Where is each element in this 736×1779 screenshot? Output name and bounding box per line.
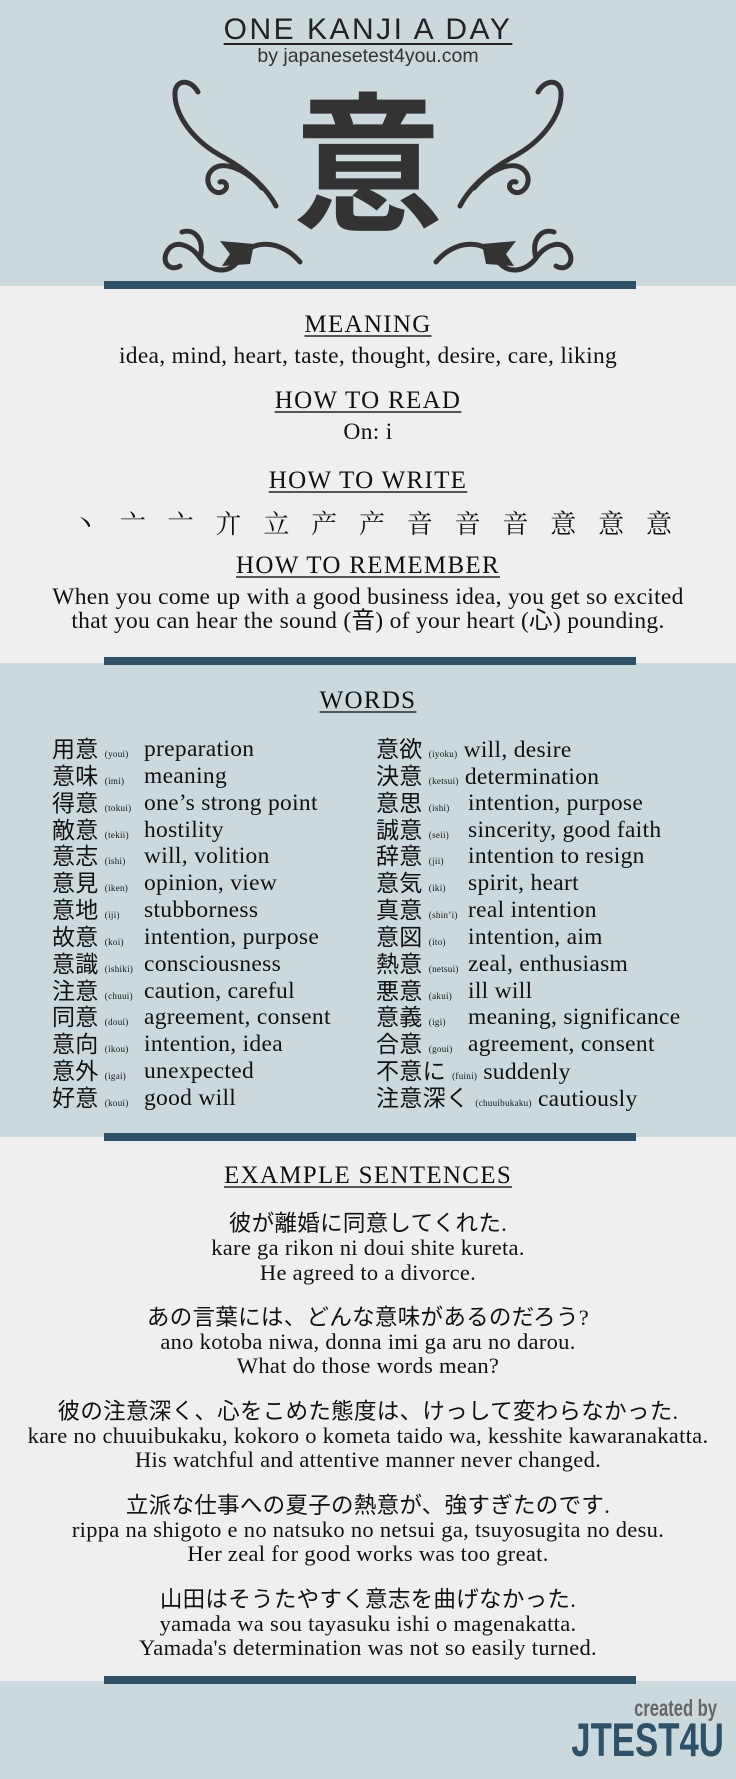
vocabulary list: real intention: [468, 897, 597, 923]
stroke order: 丶: [72, 504, 98, 541]
vocabulary list: 合意 (goui): [376, 1031, 453, 1057]
vocabulary list: opinion, view: [144, 870, 277, 896]
stroke order: 意: [550, 504, 576, 541]
example sentences: rippa na shigoto e no natsuko no netsui ga, tsuyosugita no desu.: [72, 1517, 664, 1542]
vocabulary list: will, volition: [144, 843, 270, 869]
heading: words: WORDS: [320, 687, 416, 714]
panel: footer background: [0, 1681, 736, 1779]
example sentences: 彼が離婚に同意してくれた.: [229, 1211, 507, 1236]
vocabulary list: 意義 (igi): [376, 1004, 446, 1030]
vocabulary list: one’s strong point: [144, 790, 318, 816]
vocabulary list: good will: [144, 1085, 236, 1111]
stroke order: 产: [311, 504, 337, 541]
vocabulary list: 意気 (iki): [376, 870, 446, 896]
vocabulary list: 意思 (ishi): [376, 790, 450, 816]
vocabulary list: 誠意 (seii): [376, 817, 449, 843]
logo: created by JTEST4U: created by: [634, 1695, 717, 1721]
vocabulary list: 辞意 (jii): [376, 843, 444, 869]
example sentences: ano kotoba niwa, donna imi ga aru no darou.: [160, 1329, 576, 1354]
example sentences: kare ga rikon ni doui shite kureta.: [211, 1235, 525, 1260]
title: ONE KANJI A DAY: [224, 13, 512, 46]
example sentences: His watchful and attentive manner never changed.: [135, 1447, 601, 1472]
logo: created by JTEST4U: JTEST4U: [571, 1713, 724, 1766]
vocabulary list: intention, purpose: [144, 924, 319, 950]
vocabulary list: meaning: [144, 763, 227, 789]
vocabulary list: caution, careful: [144, 978, 295, 1004]
vocabulary list: sincerity, good faith: [468, 817, 661, 843]
vocabulary list: 不意に (fuini) suddenly: [376, 1058, 571, 1085]
example sentences: [28, 1211, 708, 1660]
vocabulary list: 得意 (tokui): [52, 790, 131, 816]
vocabulary list: 故意 (koi): [52, 924, 124, 950]
heading: how to remember: HOW TO REMEMBER: [236, 552, 500, 579]
vocabulary list: 意向 (ikou): [52, 1031, 129, 1057]
example sentences: 彼の注意深く、心をこめた態度は、けっして変わらなかった.: [58, 1399, 678, 1424]
heading: how to write: HOW TO WRITE: [269, 467, 467, 494]
vocabulary list: spirit, heart: [468, 870, 579, 896]
big kanji: 意: [293, 46, 443, 263]
text: mnemonic: that you can hear the sound (音) of your heart (心) pounding.: [71, 608, 665, 634]
example sentences: What do those words mean?: [237, 1353, 499, 1378]
vocabulary list: 意欲 (iyoku) will, desire: [376, 736, 572, 763]
vocabulary list: 敵意 (tekii): [52, 817, 129, 843]
panel: header background: [0, 0, 736, 286]
example sentences: Her zeal for good works was too great.: [187, 1541, 549, 1566]
vocabulary list: agreement, consent: [468, 1031, 655, 1057]
stroke order: 音: [455, 504, 481, 541]
heading: meaning: MEANING: [304, 311, 432, 338]
stroke order: [72, 504, 672, 541]
vocabulary list: intention, aim: [468, 924, 603, 950]
stroke order: 意: [646, 504, 672, 541]
vocabulary list: 好意 (koui): [52, 1085, 129, 1111]
subtitle: by japanesetest4you.com: [257, 45, 479, 67]
vocabulary list: hostility: [144, 817, 224, 843]
vocabulary list: meaning, significance: [468, 1004, 680, 1030]
example sentences: yamada wa sou tayasuku ishi o magenakatta.: [160, 1611, 576, 1636]
vocabulary list: ill will: [468, 978, 532, 1004]
vocabulary list: stubborness: [144, 897, 258, 923]
example sentences: 立派な仕事への夏子の熱意が、強すぎたのです.: [126, 1493, 610, 1518]
stroke order: 亠: [120, 504, 146, 541]
stroke order: 产: [359, 504, 385, 541]
vocabulary list: agreement, consent: [144, 1004, 331, 1030]
heading: how to read: HOW TO READ: [275, 387, 461, 414]
vocabulary list: 意地 (iji): [52, 897, 120, 923]
example sentences: あの言葉には、どんな意味があるのだろう?: [147, 1305, 589, 1330]
heading: example sentences: EXAMPLE SENTENCES: [224, 1162, 512, 1189]
example sentences: 山田はそうたやすく意志を曲げなかった.: [160, 1587, 576, 1612]
vocabulary list: 意外 (igai): [52, 1058, 126, 1084]
vocabulary list: intention, idea: [144, 1031, 283, 1057]
vocabulary list: 用意 (youi): [52, 736, 129, 762]
vocabulary list: 意図 (ito): [376, 924, 446, 950]
vocabulary list: 注意深く (chuuibukaku) cautiously: [376, 1085, 638, 1112]
example sentences: Yamada's determination was not so easily turned.: [139, 1635, 597, 1660]
vocabulary list: 意見 (iken): [52, 870, 128, 896]
vocabulary list: consciousness: [144, 951, 281, 977]
example sentences: kare no chuuibukaku, kokoro o kometa taido wa, kesshite kawaranakatta.: [28, 1423, 708, 1448]
text: meaning: idea, mind, heart, taste, thought, desire, care, liking: [119, 343, 617, 369]
vocabulary list: 悪意 (akui): [376, 978, 452, 1004]
vocabulary list: 意味 (imi): [52, 763, 124, 789]
stroke order: 立: [263, 504, 289, 541]
vocabulary list: 意志 (ishi): [52, 843, 126, 869]
stroke order: 音: [407, 504, 433, 541]
vocabulary list: 熱意 (netsui): [376, 951, 459, 977]
vocabulary list: intention to resign: [468, 843, 645, 869]
stroke order: 亠: [168, 504, 194, 541]
icon: ornamental swirls: [162, 80, 574, 272]
vocabulary list: 同意 (doui): [52, 1004, 129, 1030]
vocabulary list: 真意 (shin’i): [376, 897, 458, 923]
vocabulary list: unexpected: [144, 1058, 254, 1084]
panel: words background: [0, 663, 736, 1137]
text: reading: On: i: [343, 419, 393, 445]
example sentences: He agreed to a divorce.: [260, 1260, 476, 1285]
stroke order: 亣: [215, 504, 242, 541]
vocabulary list: intention, purpose: [468, 790, 643, 816]
vocabulary list: zeal, enthusiasm: [468, 951, 628, 977]
text: mnemonic: [52, 584, 684, 634]
vocabulary list: preparation: [144, 736, 254, 762]
stroke order: 音: [502, 504, 528, 541]
vocabulary list: 意識 (ishiki): [52, 951, 133, 977]
vocabulary list: 決意 (ketsui) determination: [376, 763, 599, 790]
stroke order: 意: [598, 504, 624, 541]
text: mnemonic: When you come up with a good business idea, you get so excited: [52, 584, 684, 610]
vocabulary list: [52, 736, 680, 1112]
vocabulary list: 注意 (chuui): [52, 978, 133, 1004]
